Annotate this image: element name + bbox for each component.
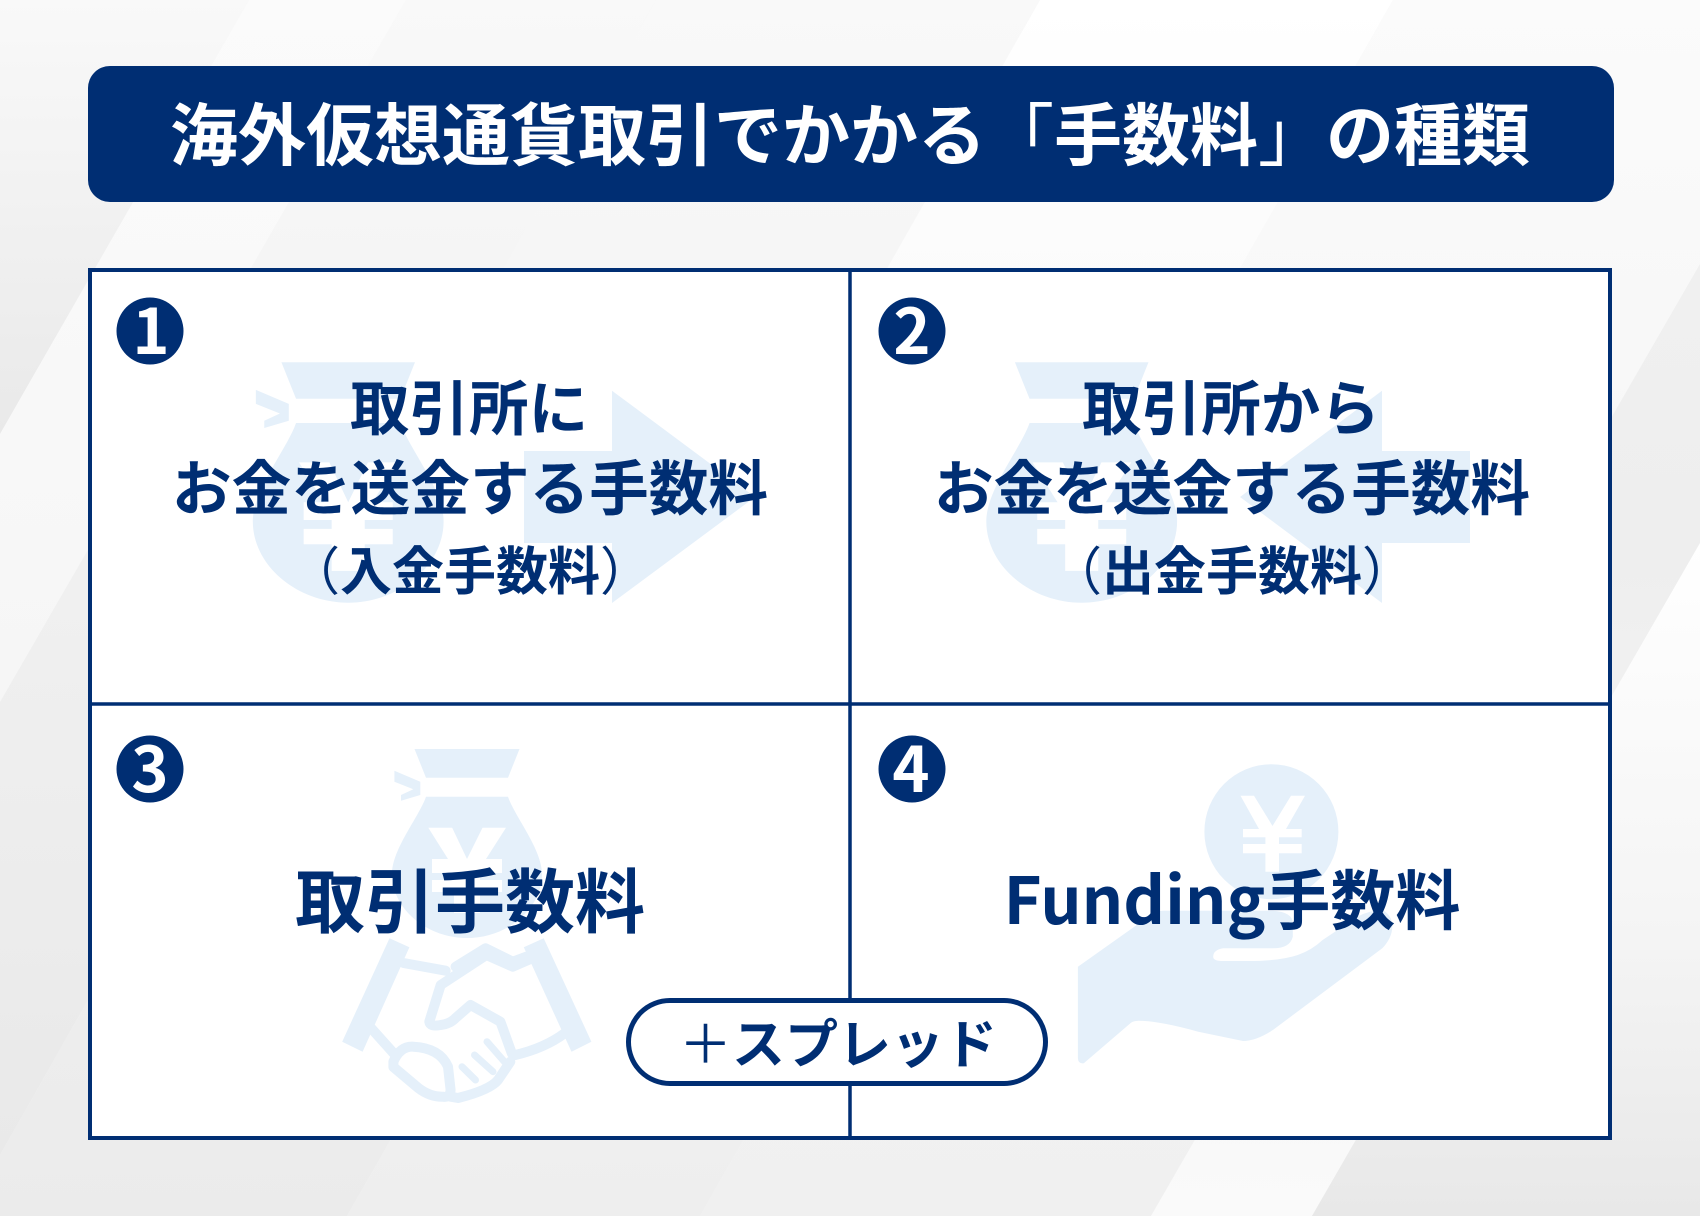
number badge 1: 1 xyxy=(132,282,170,373)
title: 海外仮想通貨取引でかかる「手数料」の種類 xyxy=(170,81,1530,180)
title banner xyxy=(88,66,1614,202)
icon: money bag with left arrow xyxy=(986,362,1470,603)
panel 3: trading fee xyxy=(116,720,645,1098)
panel 4: funding fee xyxy=(878,720,1460,1063)
icon: money bag with right arrow xyxy=(253,362,755,603)
icon: hand holding yen coin xyxy=(1078,764,1392,1063)
label: deposit fee: お金を送金する手数料 xyxy=(172,442,768,528)
label: deposit fee: 取引所に xyxy=(350,362,588,448)
panel 2: withdrawal fee xyxy=(878,282,1530,605)
spread pill xyxy=(628,1000,1046,1084)
number badge 1 xyxy=(116,282,184,373)
icon: money bag and handshake xyxy=(342,749,591,1098)
number badge 3: 3 xyxy=(131,720,169,811)
pill label: ＋スプレッド xyxy=(679,1003,997,1079)
number badge 3 xyxy=(116,720,184,811)
label: trading fee: 取引手数料 xyxy=(295,847,645,948)
label: withdrawal fee: お金を送金する手数料 xyxy=(934,442,1530,528)
number badge 4 xyxy=(878,720,946,811)
label: withdrawal fee: （出金手数料） xyxy=(1050,530,1414,605)
number badge 2 xyxy=(878,282,946,373)
label: deposit fee xyxy=(172,362,768,605)
label: withdrawal fee xyxy=(934,362,1530,605)
panel 1: deposit fee xyxy=(116,282,768,605)
number badge 2: 2 xyxy=(893,282,931,373)
panel: fee grid xyxy=(90,270,1610,1138)
label: deposit fee: （入金手数料） xyxy=(288,530,652,605)
label: funding fee: Funding手数料 xyxy=(1004,849,1460,943)
label: withdrawal fee: 取引所から xyxy=(1082,362,1380,448)
number badge 4: 4 xyxy=(892,720,930,811)
